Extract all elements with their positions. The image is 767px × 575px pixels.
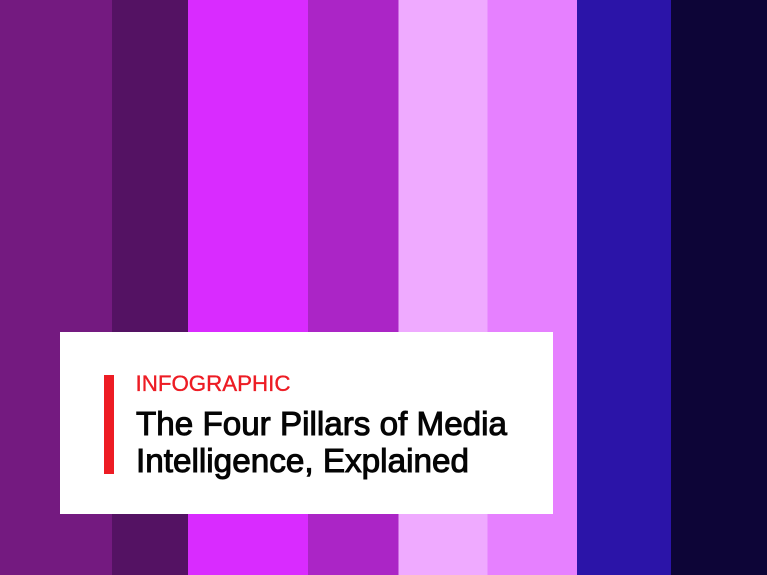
heading: Intelligence, Explained — [136, 442, 469, 479]
heading — [136, 405, 508, 479]
red accent bar — [104, 375, 114, 474]
eyebrow label: INFOGRAPHIC — [136, 371, 291, 396]
heading: The Four Pillars of Media — [136, 405, 508, 442]
title card — [60, 332, 553, 514]
